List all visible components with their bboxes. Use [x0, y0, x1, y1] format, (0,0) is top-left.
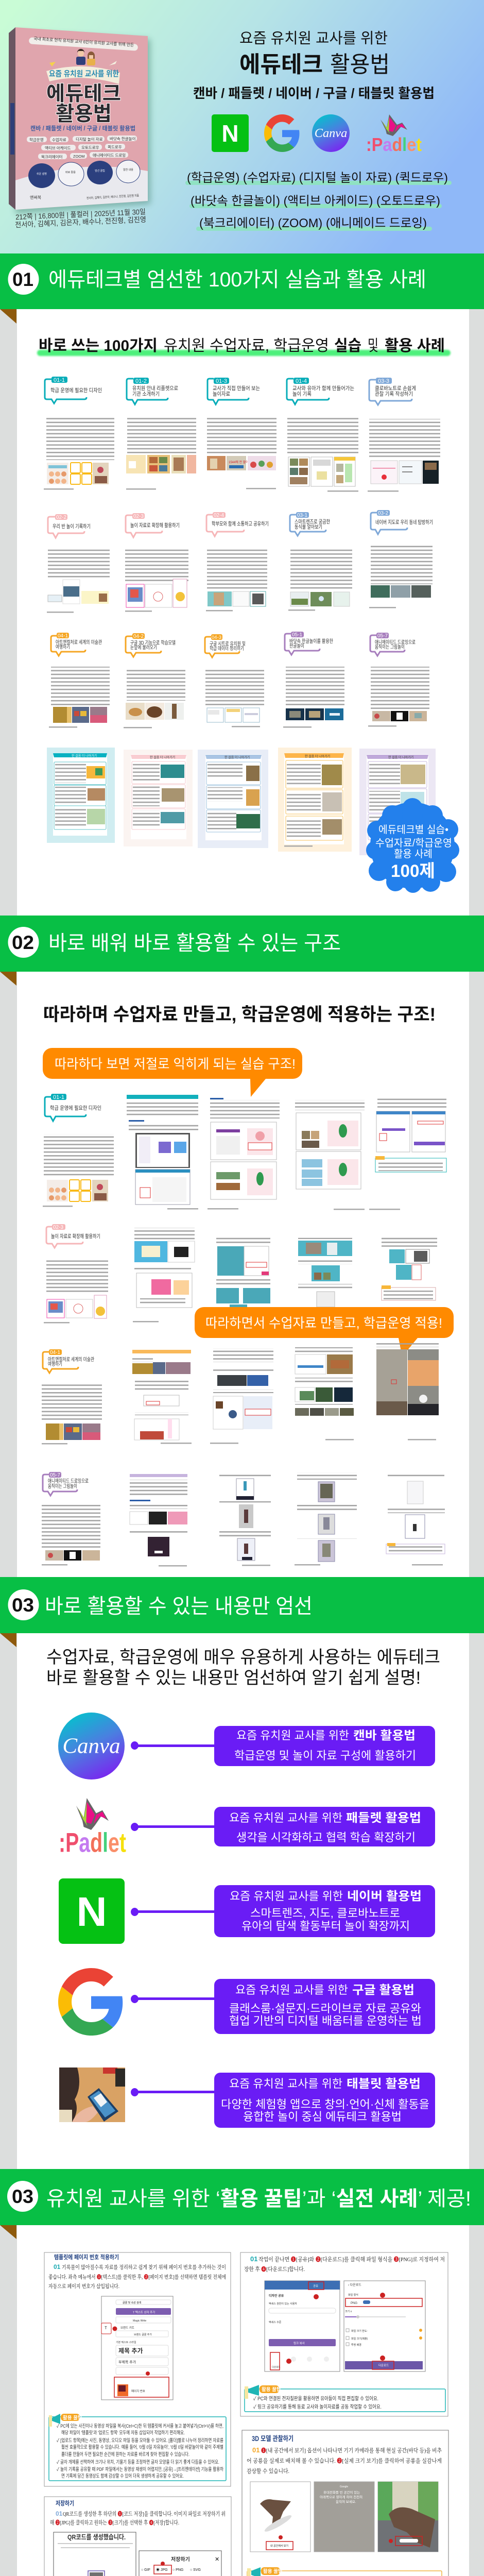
- screenshot: share panel: 액세스 수준: [269, 2320, 282, 2324]
- chapter 02-4 sample: [206, 512, 269, 611]
- tool row: tablet: [59, 2067, 435, 2128]
- screenshot: share panel: [265, 2281, 340, 2371]
- screenshot: save options: ✕: [215, 2556, 219, 2563]
- book meta: [15, 208, 146, 229]
- text box: 요즘 유치원 교사를 위한: [230, 1890, 343, 1903]
- hero banner: [0, 0, 484, 253]
- tip box: [247, 2567, 442, 2576]
- chapter 01-2 sample: 유치원 안내 리플렛으로: [132, 385, 178, 392]
- practice example page: teal: 한 걸음 더 나아가기: [72, 754, 97, 758]
- callout bubble: [43, 1472, 89, 1496]
- practice example page: pink: [124, 750, 193, 846]
- book cover: [9, 27, 150, 214]
- practice example page: blue: [198, 750, 268, 848]
- text box: 요즘 유치원 교사를 위한: [235, 1984, 348, 1996]
- hero title: 요즘 유치원 교사를 위한: [239, 30, 388, 47]
- screenshot: Canva text menu: 브랜드 글꼴 추가: [134, 2333, 152, 2336]
- tip box: ✓ 놀이 기록을 공유할 때 PDF 파일에서는 동영상 재생이 어렵지만, [공유]→[프리젠테이션] 기능을 활용하: [57, 2466, 223, 2472]
- tip box: ✓ PC에 있는 사진이나 동영상 파일을 복사(Ctrl+C)한 뒤 템플릿에 커서를 놓고 붙여넣기(Ctrl+V)를 하면,: [57, 2423, 223, 2429]
- chapter 04-2 sample: 04-2: [133, 634, 144, 639]
- section band 01: [0, 253, 484, 324]
- chapter 01-4 sample: 놀이 기록: [292, 391, 312, 397]
- chapter 01-3 sample: 놀이자료: [213, 391, 230, 397]
- Arts and Culture page 3: [210, 1348, 273, 1444]
- page: template page numbers: 01: [54, 2263, 61, 2270]
- screenshot: Canva text menu: 부제목 추가: [118, 2360, 136, 2364]
- chapter 01-3 sample: 교사가 직접 만들어 보는: [213, 385, 260, 392]
- section band 02: [0, 916, 484, 986]
- chapter 04-1 sample: 아트앤컬처로 세계의 미술관: [56, 639, 102, 646]
- tip box: ✓ 글자 개체를 선택하여 크기나 위치, 기울기 등을 조정하면 글자 모양을 더 읽기 좋게 다듬을 수 있어요.: [57, 2459, 219, 2465]
- chapter 04-1 spread: [42, 1349, 102, 1445]
- callout bubble: [46, 1224, 100, 1248]
- subheading: 100 practices: 실습: [334, 337, 361, 354]
- book meta: 전서아, 김혜지, 김은자, 배수나, 전진형, 김진영: [15, 215, 146, 229]
- screenshot: download panel: 파일 크기 한도:: [351, 2329, 368, 2333]
- callout: apply while practising: 따라하면서 수업자료 만들고, 학급운영 적용!: [205, 1315, 442, 1331]
- chapter 05-1 sample: 05-1: [292, 632, 302, 638]
- chapter 05-7 sample: 05-7: [377, 633, 388, 639]
- callout bubble: [43, 1349, 94, 1373]
- chapter 05-7 sample: 애니메이티드 드로잉으로: [375, 639, 416, 646]
- icon: teachers: [49, 49, 117, 66]
- chapter 01-3 sample: [207, 378, 276, 489]
- chapter 02-4 sample: 학부모와 함께 소통하고 공유하기: [212, 520, 269, 527]
- callout blob: 100 examples: 100제: [391, 861, 435, 881]
- chapter 01-1 sample: 01-1: [54, 377, 65, 383]
- chapter 01-1 sample: [44, 377, 114, 489]
- screenshot: save options: ○ SVG: [190, 2568, 201, 2572]
- tool list with highlights: [185, 171, 452, 231]
- callout: follow-along practice: [43, 1048, 302, 1097]
- screenshot: Canva text menu: Magic Write: [133, 2319, 147, 2323]
- callout bubble: 움직이는 그림놀이: [48, 1483, 77, 1489]
- book cover: 디지털 놀이 자료: [76, 137, 103, 142]
- chapter 01-4 sample: [287, 378, 358, 492]
- text box: 협업 기반의 디지털 배움터를 운영하는 법: [229, 2014, 422, 2027]
- hero title: 활용법: [330, 52, 390, 77]
- tip box: 해당 파일이 '템플릿'과 '업로드 항목' 모두에 자동 삽입되어 작업하기 편리해요.: [61, 2430, 185, 2436]
- callout blob: 100 examples: 수업자료/학급운영: [375, 837, 452, 849]
- chapter 03-1 sample: 03-1: [297, 513, 307, 518]
- tip box: ✓ PC와 연결된 전자칠판을 활용하면 유아들이 직접 편집할 수 있어요.: [253, 2395, 378, 2402]
- section band 03 tips: [0, 2169, 484, 2239]
- Padlet steps page 2: [133, 1228, 195, 1322]
- Canva steps page 4: [295, 1100, 365, 1210]
- screenshot: Canva text menu: 제목 추가: [118, 2347, 143, 2354]
- Canva steps page 5 with tip: [369, 1098, 446, 1210]
- page: share and download: 작업이 끝나면 ❶[공유]와 ❷[다운로드]를 클릭해 파일 형식을 ❸[PNG]로 지정하여 저: [258, 2256, 445, 2263]
- screenshot: Canva text menu: 글꼴 및 속성 검색: [123, 2301, 142, 2304]
- chapter 02-3 sample: [125, 513, 188, 612]
- subheading: 100 practices: 유치원 수업자료, 학급운영: [164, 337, 329, 354]
- page: save QR: [44, 2497, 231, 2576]
- screenshot: Canva text menu: [101, 2296, 173, 2400]
- page: 3D model: [242, 2430, 448, 2576]
- practice example page: blue: 한 걸음 더 나아가기: [224, 755, 250, 759]
- tool row: Canva: [58, 1713, 435, 1780]
- callout bubble: 04-1: [50, 1350, 60, 1355]
- text box: 융합한 놀이 중심 에듀테크 활용법: [243, 2110, 402, 2123]
- chapter 04-3 sample: 구글 시트로 유치원 및: [210, 641, 246, 647]
- photo: child using tablet: [59, 2067, 125, 2122]
- text box: 다양한 체험형 앱으로 창의·언어·신체 활동을: [221, 2098, 429, 2111]
- practice example page: orange: [278, 748, 352, 852]
- text box: [214, 1807, 435, 1846]
- tip box: 폴더를 만들어 두면 필요한 순간에 원하는 자료를 바르게 찾아 편집할 수 있습니다.: [61, 2451, 189, 2458]
- chapter 05-7 sample: 움직이는 그림놀이: [375, 644, 405, 650]
- chapter 01-4 sample: 교사와 유아가 함께 만들어가는: [292, 385, 354, 392]
- screenshot: download panel: 파일 크기(제출): [351, 2337, 368, 2341]
- section band 03: 바로 활용할 수 있는 내용만 엄선: [45, 1595, 313, 1618]
- section band 02: 02: [12, 932, 34, 953]
- Padlet steps page 3: [216, 1236, 270, 1308]
- text box: [214, 1979, 435, 2034]
- book cover: 캔바 / 패들렛 / 네이버 / 구글 / 태블릿 활용법: [30, 125, 135, 132]
- screenshot: download panel: 다운로드: [378, 2363, 389, 2367]
- book cover: 퀵드로우: [108, 145, 122, 149]
- screenshot: download panel: 파일 형식: [348, 2293, 358, 2297]
- screenshot: share panel: 디자인 공유: [269, 2294, 284, 2298]
- page: save QR: 해 ❷[JPG]를 클릭하고 원하는 ❸[크기]를 선택한 후 ❹[저장]합니다.: [50, 2519, 179, 2526]
- tool row: Google: [58, 1968, 435, 2036]
- screenshot: save options: ○ PNG: [172, 2568, 183, 2572]
- book cover: ZOOM: [73, 154, 84, 159]
- callout: apply while practising: [195, 1307, 454, 1357]
- screenshot: download panel: 투명 배경: [351, 2343, 361, 2347]
- book cover: 쉬운 설명: [37, 172, 47, 176]
- callout bubble: [45, 1094, 101, 1121]
- text box: 태블릿 활용법: [347, 2077, 421, 2090]
- practice example page: orange: 한 걸음 더 나아가기: [305, 754, 330, 758]
- screenshot: AR prompt: 아래쪽으로 향하게 하여 천천히: [320, 2495, 362, 2499]
- page: template page numbers: 템플릿에 페이지 번호 적용하기: [54, 2253, 119, 2261]
- screenshot: QR created: [54, 2532, 136, 2576]
- chapter 01-1 sample: 학급 운영에 필요한 디자인: [50, 387, 102, 394]
- Animated Drawings page 5 with tip: [386, 1474, 445, 1565]
- page: save QR: 저장하기: [56, 2499, 74, 2507]
- chapter 01-2 sample: [126, 378, 196, 489]
- screenshot: download panel: 크기 x: [345, 2310, 352, 2313]
- chapter 03-3 sample: 03-3: [378, 378, 389, 384]
- book cover: 에듀테크: [46, 83, 121, 105]
- page: share and download: [240, 2252, 448, 2416]
- page: 3D model: ❶[내 공간에서 보기] 옵션이 나타나면 기기 카메라를 통해 현실 공간(바닥 등)을 비추: [261, 2447, 442, 2454]
- Padlet steps page 5 with tip: [382, 1237, 437, 1300]
- chapter 01-4 sample: 01-4: [296, 378, 307, 384]
- screenshot: download panel: ‹ 다운로드: [348, 2283, 361, 2287]
- chapter 01-2 sample: 기관 소개하기: [132, 391, 160, 397]
- callout blob: 100 examples: 에듀테크별 실습•: [378, 824, 448, 836]
- screenshot: Canva text menu: T 텍스트 상자 추가: [133, 2310, 155, 2314]
- hero title: 에듀테크: [239, 52, 323, 77]
- practice example page: purple: 한 걸음 더 나아가기: [388, 755, 413, 759]
- tool list with highlights: (학급운영) (수업자료) (디지털 놀이 자료) (퀵드로우): [187, 171, 448, 185]
- screenshot: AR dinosaur in room: [378, 2482, 438, 2552]
- subheading: 100 practices: [37, 337, 451, 356]
- book meta: 212쪽 | 16,800원 | 풀컬러 | 2025년 11월 30일: [15, 208, 146, 221]
- chapter 01-3 sample: 1544에 전 팔아와: [229, 460, 252, 464]
- screenshot: QR created: QR코드를 생성했습니다.: [67, 2533, 126, 2541]
- chapter 02-2 sample: [47, 514, 110, 613]
- chapter 05-1 sample: 한글놀이: [289, 643, 304, 649]
- hero title: [193, 30, 435, 101]
- book cover: 활용법: [56, 103, 112, 125]
- subheading: 100 practices: 및: [368, 337, 378, 354]
- chapter 03-3 sample: [368, 378, 440, 492]
- book cover: 요즘 유치원 교사를 위한: [49, 70, 119, 78]
- chapter 03-1 sample: [288, 512, 352, 611]
- text box: 패들렛 활용법: [346, 1811, 421, 1824]
- section band 03 tips: 03: [12, 2186, 33, 2207]
- tip box: 면 기록에 담긴 동영상도 함께 감상할 수 있어 더욱 생생하게 공유할 수 있어요.: [61, 2473, 184, 2479]
- screenshot: share panel: 공유: [313, 2284, 318, 2288]
- book cover: 애니메이티드 드로잉: [93, 152, 126, 158]
- intro text: 수업자료, 학급운영에 매우 유용하게 사용하는 에듀테크: [46, 1648, 440, 1667]
- chapter 04-3 sample: [205, 634, 264, 727]
- chapter 02-2 sample: 02-2: [56, 515, 66, 520]
- screenshot: share panel: 링크 복사: [293, 2341, 305, 2345]
- chapter 04-1 sample: [49, 633, 110, 727]
- chapter 05-7 sample: [368, 633, 429, 726]
- book cover: 바로 활용: [65, 171, 76, 174]
- practice example page: pink: 한 걸음 더 나아가기: [150, 755, 175, 759]
- callout: follow-along practice: 따라하다 보면 저절로 익히게 되는 실습 구조!: [55, 1056, 296, 1072]
- Canva steps page 2: [127, 1095, 198, 1210]
- tool row: Padlet: [59, 1798, 435, 1858]
- chapter 03-2 sample: 네이버 지도로 우리 동네 탐방하기: [375, 519, 433, 526]
- callout bubble: 아트앤컬처로 세계의 미술관: [48, 1356, 94, 1363]
- text box: 네이버 활용법: [347, 1889, 422, 1903]
- chapter 02-3 spread: [44, 1224, 108, 1323]
- chapter 04-3 sample: 04-3: [212, 635, 221, 640]
- callout blob: 100 examples: 활용 사례: [394, 848, 433, 860]
- chapter 01-1 spread: [43, 1094, 114, 1207]
- tip box: [49, 2414, 226, 2481]
- chapter 02-3 sample: 놀이 자료로 확장해 활용하기: [130, 522, 180, 529]
- section band 03: [0, 1577, 484, 1647]
- tip box: 활용 꿀팁: [262, 2386, 281, 2393]
- text box: 유아의 탐색 활동부터 놀이 확장까지: [241, 1920, 410, 1933]
- book cover: 학급운영: [29, 137, 44, 142]
- book cover: 북크리에이터: [41, 154, 62, 159]
- text box: [214, 1885, 435, 1937]
- chapter 04-1 sample: 여행하기: [56, 643, 70, 650]
- screenshot: AR prompt: 휴대전화를 빈 공간이 있는: [323, 2490, 360, 2495]
- callout bubble: 02-3: [53, 1225, 63, 1230]
- screenshot: Canva text menu: 기본 텍스트 스타일: [116, 2341, 136, 2344]
- chapter 01-3 sample: 01-3: [216, 378, 227, 384]
- text box: [214, 2073, 435, 2128]
- tip box: ✓ [업로드 항목]에는 사진, 동영상, 오디오 파일 등을 모아둘 수 있어요. [폴더]별로 나누어 정리하면 자료를: [57, 2437, 223, 2444]
- page: 3D model: 감상할 수 있습니다.: [247, 2467, 289, 2475]
- text box: [214, 1726, 435, 1766]
- logos row: [212, 114, 422, 155]
- screenshot: save options: ○ GIF: [141, 2568, 150, 2572]
- book cover: 전서아, 김혜지, 김은자, 배수나, 전진형, 김진영 지음: [87, 193, 140, 200]
- chapter 02-4 sample: 02-4: [214, 513, 224, 518]
- Arts and Culture page 5: [376, 1342, 439, 1440]
- page: share and download: 장한 후 ❹[다운로드]합니다.: [244, 2265, 305, 2273]
- screenshot: share panel: 액세스 권한이 있는 사용자: [269, 2302, 297, 2306]
- callout bubble: 학급 운영에 필요한 디자인: [50, 1105, 101, 1111]
- chapter 05-7 spread: [42, 1472, 100, 1565]
- page: template page numbers: 자동으로 페이지 번호가 삽입됩니다.: [48, 2283, 119, 2290]
- text box: 생각을 시각화하고 협력 학습 확장하기: [236, 1831, 416, 1844]
- chapter 04-2 sample: 눈앞에 불러오기: [130, 645, 157, 651]
- book cover: 국내 최초로 현직 유치원 교사 6인이 유치원 교사를 위해 만든: [33, 36, 134, 47]
- screenshot: Canva text menu: 페이지 번호: [131, 2389, 145, 2393]
- book cover: 오토드로우: [81, 145, 99, 150]
- book cover: 액티브 아케이드: [45, 145, 71, 150]
- chapter 05-1 sample: [283, 632, 344, 727]
- section band 02: 바로 배워 바로 활용할 수 있는 구조: [48, 932, 341, 955]
- text box: 구글 활용법: [352, 1983, 414, 1996]
- section band 01: 에듀테크별 엄선한 100가지 실습과 활용 사례: [48, 268, 426, 291]
- chapter 03-1 sample: 동식물 알아보기: [295, 524, 322, 530]
- chapter 03-2 sample: [369, 510, 433, 608]
- page: 3D model: 01: [252, 2446, 260, 2454]
- screenshot: Canva text menu: 브랜드 키트: [120, 2326, 134, 2330]
- chapter 05-1 sample: 바닷속 한글놀이를 활용한: [289, 638, 333, 645]
- text box: 스마트렌즈, 지도, 클로바노트로: [250, 1907, 400, 1920]
- Animated Drawings page 2: [130, 1474, 187, 1566]
- subheading: 100 practices: 바로 쓰는 100가지: [39, 337, 158, 354]
- practice example page: purple: [359, 749, 436, 855]
- page: save QR: QR코드를 생성한 후 하단의 ❶[코드 저장]을 클릭합니다. 이미지 파일로 저장하기 위: [63, 2510, 226, 2517]
- chapter 02-3 sample: 02-3: [133, 514, 144, 519]
- intro text: [46, 1648, 440, 1688]
- screenshot: save options: ◉ JPG: [156, 2568, 168, 2572]
- section band 03: 03: [12, 1595, 34, 1616]
- book cover: 알찬 내용: [123, 168, 133, 172]
- chapter 04-3 sample: 학급 데이터 정리하기: [210, 645, 244, 652]
- Arts and Culture page 2: [132, 1350, 192, 1444]
- chapter 02-2 sample: 우리 반 놀이 기록하기: [53, 523, 91, 530]
- chapter 03-3 sample: 관찰 기록 작성하기: [375, 391, 413, 397]
- chapter 04-2 sample: [124, 633, 185, 728]
- screenshot: AR prompt: Google: [340, 2485, 348, 2488]
- screenshot: download panel: [344, 2281, 425, 2371]
- subheading: 100 practices: 활용 사례: [385, 337, 445, 354]
- section band 01: 01: [12, 269, 33, 290]
- text box: 요즘 유치원 교사를 위한: [229, 1811, 342, 1824]
- chapter 03-2 sample: 03-2: [378, 511, 388, 516]
- text box: 요즘 유치원 교사를 위한: [229, 2077, 342, 2090]
- screenshot: download panel: PNG: [351, 2302, 357, 2305]
- page: share and download: 01: [250, 2255, 257, 2263]
- text box: 캔바 활용법: [353, 1728, 416, 1742]
- book cover: 바닷속 한글놀이: [110, 136, 135, 141]
- heading: follow-along structure: 따라하며 수업자료 만들고, 학급운영에 적용하는 구조!: [43, 1005, 436, 1025]
- callout bubble: 05-7: [50, 1472, 60, 1478]
- callout blob: 100 examples: [366, 798, 459, 893]
- tip box: 활용 꿀팁: [263, 2568, 283, 2574]
- Animated Drawings page 4: [295, 1472, 357, 1565]
- page: save QR: 01: [56, 2510, 63, 2517]
- callout bubble: 놀이 자료로 확장해 활용하기: [51, 1233, 100, 1240]
- tip box: ✓ 링크 공유하기를 통해 동료 교사와 놀이자료를 공동 작업할 수 있어요.: [253, 2403, 382, 2410]
- chapter 04-1 sample: 04-1: [58, 633, 68, 639]
- text box: 요즘 유치원 교사를 위한: [236, 1729, 349, 1742]
- section band 03 tips: 유치원 교사를 위한 ‘활용 꿀팁’과 ‘실전 사례’ 제공!: [46, 2188, 471, 2210]
- screenshot: share panel: 다운로드: [272, 2365, 281, 2369]
- Arts and Culture page 4: [295, 1347, 354, 1440]
- tip box: 훨씬 효율적으로 활용할 수 있습니다. 예를 들어, '0월 0일 자유놀이', '0월 0일 바깥놀이'와 같이 주제별: [61, 2444, 223, 2450]
- chapter 04-2 sample: 구글 3D 기능으로 학습모델: [130, 640, 176, 646]
- page: template page numbers: 좋습니다. 좌측 메뉴에서 ❶[텍스트]를 클릭한 후, ❷[페이지 번호]를 선택하면 템플릿 전체에: [48, 2274, 226, 2280]
- screenshot: Canva text menu: T: [105, 2326, 107, 2330]
- book cover: 엄선 꿀팁: [95, 169, 105, 173]
- tool row: Naver: [59, 1878, 435, 1944]
- screenshot: AR prompt: 움직여 보세요.: [336, 2499, 356, 2504]
- page: template page numbers: 기록물이 많아질수록 자료를 정리하고 쉽게 찾기 위해 페이지 번호를 추가하는 것이: [62, 2264, 226, 2270]
- page: 3D model: 3D 모델 관찰하기: [252, 2435, 293, 2443]
- Padlet steps page 4: [298, 1237, 352, 1307]
- chapter 03-1 sample: 스마트렌즈로 궁금한: [295, 519, 330, 525]
- page: template page numbers: [44, 2252, 231, 2486]
- screenshot: save options: [139, 2551, 221, 2576]
- screenshot: save options: 저장하기: [171, 2556, 190, 2563]
- practice example page: teal: [47, 748, 115, 843]
- screenshot: dinosaur model: [250, 2482, 310, 2552]
- callout bubble: 애니메이티드 드로잉으로: [48, 1478, 89, 1484]
- Canva steps page 3: [208, 1098, 280, 1210]
- intro text: 바로 활용할 수 있는 내용만 엄선하여 알기 쉽게 설명!: [46, 1668, 421, 1688]
- screenshot: dinosaur model: 내 공간에서 보기: [270, 2544, 288, 2548]
- hero title: 캔바 / 패들렛 / 네이버 / 구글 / 태블릿 활용법: [193, 86, 435, 101]
- callout bubble: 여행하기: [48, 1361, 62, 1367]
- tip box: [245, 2385, 445, 2412]
- chapter 03-3 sample: 클로바노트로 손쉽게: [375, 385, 416, 392]
- screenshot: AR prompt: [314, 2482, 374, 2552]
- text box: 클래스룸·설문지·드라이브로 자료 공유와: [229, 2002, 421, 2015]
- page: 3D model: 어 공룡을 실제로 배치해 볼 수 있습니다. ❷[실제 크기 보기]를 클릭하여 공룡을 실감나게: [247, 2457, 442, 2464]
- tool list with highlights: (바닷속 한글놀이) (액티브 아케이드) (오토드로우): [191, 194, 440, 208]
- book cover: 앤써북: [30, 195, 41, 200]
- tip box: 활용 꿀팁: [63, 2415, 82, 2421]
- Animated Drawings page 3: [219, 1473, 271, 1566]
- tool list with highlights: (북크리에이터) (ZOOM) (애니메이드 드로잉): [199, 216, 427, 230]
- callout bubble: 01-1: [53, 1094, 64, 1100]
- chapter 01-2 sample: 01-2: [135, 378, 147, 384]
- book cover: 수업자료: [52, 138, 66, 142]
- text box: 학급운영 및 놀이 자료 구성에 활용하기: [234, 1749, 416, 1762]
